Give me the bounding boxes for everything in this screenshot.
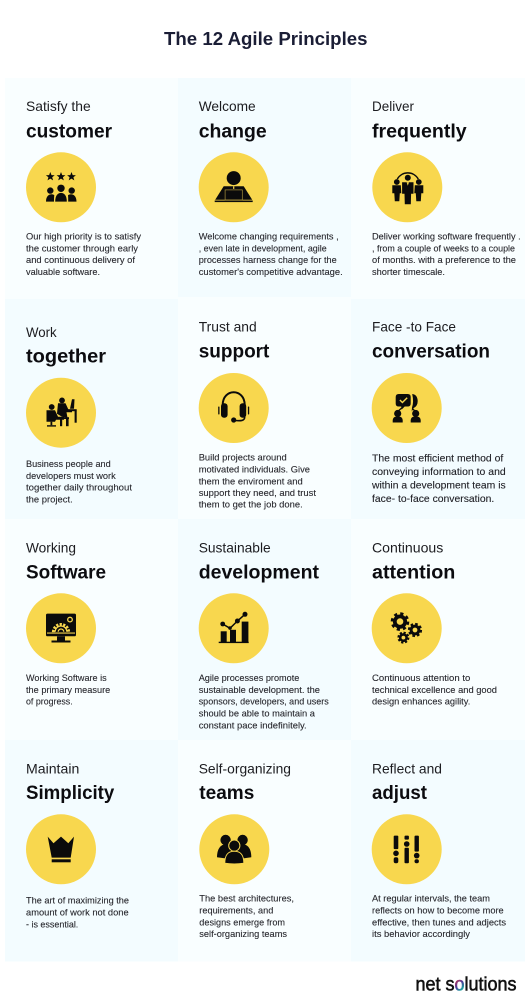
heading: self-organizing teams	[199, 760, 291, 804]
title: The 12 Agile Principles	[164, 28, 368, 49]
body text: trust and support: support they need, and trust	[199, 488, 316, 499]
heading: work together	[26, 324, 106, 368]
heading: working software	[26, 539, 106, 583]
icon: crown	[26, 814, 96, 884]
body text: self-organizing teams: The best architectures,	[199, 894, 294, 905]
body text: welcome change	[199, 232, 343, 278]
heading: deliver frequently: frequently	[372, 120, 467, 142]
heading: self-organizing teams: Self-organizing	[199, 760, 291, 776]
body text: continuous attention	[372, 673, 497, 708]
body text: satisfy the customer: Our high priority is to satisfy	[26, 232, 141, 242]
heading: work together: together	[26, 346, 106, 368]
icon: rising bar chart	[199, 593, 269, 663]
heading: maintain simplicity: Maintain	[26, 760, 79, 776]
body text: satisfy the customer: valuable software.	[26, 267, 100, 278]
logo: net solutions: net solutions	[416, 975, 516, 996]
icon: headset	[199, 373, 269, 443]
panel: sustainable development	[178, 519, 351, 740]
body text: face-to-face conversation: The most efficient method of	[372, 454, 503, 465]
heading: deliver frequently	[372, 98, 467, 142]
body text: trust and support: them to get the job done.	[199, 500, 303, 511]
body text: welcome change: processes harness change for the	[199, 255, 337, 266]
body text: face-to-face conversation	[371, 454, 506, 505]
heading: continuous attention	[372, 539, 455, 583]
body text: self-organizing teams: designs emerge from	[199, 917, 285, 928]
icon: group of people	[199, 814, 269, 884]
heading: welcome change	[199, 98, 267, 142]
heading: continuous attention: Continuous	[372, 539, 443, 555]
panel: self-organizing teams	[178, 740, 351, 962]
heading: deliver frequently: Deliver	[372, 98, 414, 114]
body text: deliver frequently: shorter timescale.	[372, 267, 445, 278]
panel: work together	[5, 299, 178, 519]
body text: sustainable development: sustainable development. the	[199, 685, 320, 696]
body text: work together: the project.	[26, 494, 73, 505]
body text: working software: the primary measure	[26, 685, 110, 696]
body text: self-organizing teams	[199, 894, 294, 940]
body text: face-to-face conversation: within a development team is	[371, 481, 506, 492]
heading: maintain simplicity	[26, 760, 114, 804]
heading: sustainable development	[199, 539, 319, 583]
icon: person at laptop	[199, 152, 269, 222]
body text: face-to-face conversation: conveying information to and	[372, 467, 506, 478]
heading: face-to-face conversation: conversation	[372, 341, 490, 363]
body text: deliver frequently: , from a couple of weeks to a couple	[372, 244, 515, 254]
body text: working software: Working Software is	[26, 673, 107, 684]
heading: working software: Software	[26, 561, 106, 583]
heading: trust and support	[199, 319, 270, 363]
panel: face-to-face conversation	[351, 299, 525, 519]
heading: reflect and adjust: Reflect and	[372, 760, 442, 776]
heading: welcome change: Welcome	[199, 98, 256, 114]
body text: welcome change: customer's competitive advantage.	[199, 267, 343, 278]
body text: work together: Business people and	[26, 459, 111, 470]
heading: maintain simplicity: Simplicity	[26, 782, 114, 804]
heading: satisfy the customer: customer	[26, 120, 112, 142]
heading: reflect and adjust	[372, 760, 442, 804]
body text: sustainable development: should be able to maintain a	[199, 708, 316, 719]
body text: satisfy the customer: the customer through early	[26, 244, 138, 254]
body text: work together	[26, 459, 132, 505]
body text: continuous attention: technical excellence and good	[372, 685, 497, 696]
heading: sustainable development: development	[199, 561, 319, 583]
heading: face-to-face conversation	[372, 319, 490, 363]
body text: trust and support: them the enviroment and	[199, 476, 303, 487]
body text: maintain simplicity: amount of work not done	[26, 907, 129, 918]
body text: face-to-face conversation: face- to-face conversation.	[372, 494, 494, 505]
heading: continuous attention: attention	[372, 561, 455, 583]
icon: three gears	[372, 593, 442, 663]
body text: satisfy the customer: and continuous delivery of	[26, 255, 135, 266]
panel: working software	[5, 519, 178, 740]
panel: continuous attention	[351, 519, 525, 740]
panel: welcome change	[178, 78, 351, 299]
body text: reflect and adjust: reflects on how to become more	[372, 906, 504, 917]
body text: working software	[26, 673, 110, 708]
body text: sustainable development: constant pace indefinitely.	[199, 720, 307, 731]
heading: trust and support: support	[199, 341, 270, 363]
heading: self-organizing teams: teams	[199, 782, 254, 804]
body text: welcome change: , even late in development, agile	[199, 244, 327, 254]
panel: trust and support	[178, 297, 351, 522]
body text: maintain simplicity: The art of maximizing the	[26, 896, 129, 907]
body text: trust and support: motivated individuals. Give	[199, 464, 310, 475]
panel: deliver frequently	[351, 78, 525, 299]
heading: satisfy the customer: Satisfy the	[26, 98, 91, 114]
icon: two people with speech bubbles	[372, 373, 442, 443]
heading: sustainable development: Sustainable	[199, 539, 271, 555]
body text: deliver frequently: Deliver working software frequently .	[372, 232, 521, 242]
body text: deliver frequently: of months. with a preference to the	[372, 255, 516, 266]
body text: satisfy the customer	[26, 232, 141, 278]
body text: reflect and adjust: At regular intervals, the team	[372, 894, 490, 905]
body text: deliver frequently	[372, 232, 521, 278]
icon: stars over customers	[26, 152, 96, 222]
body text: trust and support	[199, 453, 316, 511]
icon: three business people	[372, 152, 442, 222]
panel: maintain simplicity	[5, 740, 178, 962]
body text: sustainable development	[199, 673, 329, 731]
heading: trust and support: Trust and	[199, 319, 257, 335]
body text: reflect and adjust: its behavior accordingly	[372, 929, 470, 940]
body text: self-organizing teams: self-organizing teams	[199, 929, 287, 940]
body text: sustainable development: sponsors, developers, and users	[199, 697, 329, 708]
heading: work together: Work	[26, 324, 58, 340]
body text: working software: of progress.	[26, 697, 73, 708]
body text: continuous attention: Continuous attention to	[372, 673, 470, 684]
icon: sliders	[372, 814, 442, 884]
body text: welcome change: Welcome changing requirements ,	[199, 232, 339, 242]
body text: work together: developers must work	[26, 471, 116, 482]
body text: sustainable development: Agile processes promote	[199, 673, 299, 684]
panel: satisfy the customer	[5, 78, 178, 299]
heading: working software: Working	[26, 539, 76, 555]
heading: reflect and adjust: adjust	[372, 782, 427, 804]
icon: monitor with gears	[26, 593, 96, 663]
body text: self-organizing teams: requirements, and	[199, 906, 273, 917]
body text: reflect and adjust: effective, then tunes and adjects	[372, 917, 506, 928]
heading: face-to-face conversation: Face -to Face	[372, 319, 456, 335]
heading: satisfy the customer	[26, 98, 112, 142]
body text: reflect and adjust	[372, 894, 506, 940]
panel: reflect and adjust	[351, 740, 525, 962]
body text: continuous attention: design enhances agility.	[372, 697, 470, 708]
body text: maintain simplicity: - is essential.	[26, 919, 78, 930]
icon: people working at desks	[26, 378, 96, 448]
body text: trust and support: Build projects around	[199, 453, 287, 464]
body text: maintain simplicity	[26, 896, 129, 930]
heading: welcome change: change	[199, 120, 267, 142]
body text: work together: together daily throughout	[26, 483, 132, 494]
